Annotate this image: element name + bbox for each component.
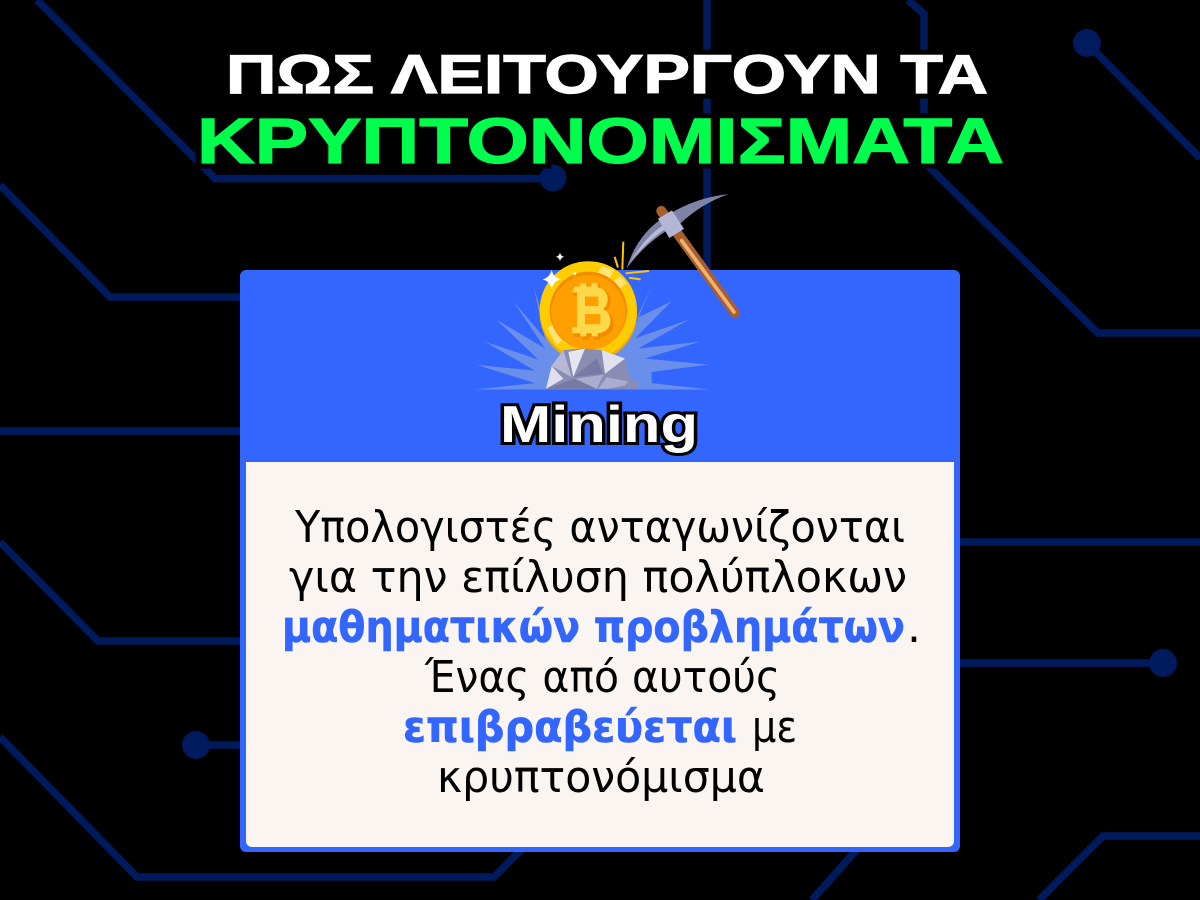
card body background — [246, 462, 954, 847]
burst rays — [475, 286, 710, 390]
card frame and blue header — [240, 270, 960, 852]
icon: bitcoin mining illustration — [475, 194, 735, 390]
title line 2 fill: ΚΡΥΠΤΟΝΟΜΙΣΜΑΤΑ — [197, 105, 1004, 177]
body text — [282, 502, 921, 803]
pickaxe — [627, 194, 735, 313]
title — [197, 43, 1004, 177]
body text: για την επίλυση πολύπλοκων — [289, 552, 907, 603]
title line 1: ΠΩΣ ΛΕΙΤΟΥΡΓΟΥΝ ΤΑ — [226, 43, 988, 105]
panel: mining card — [240, 270, 960, 852]
body text: Υπολογιστές ανταγωνίζονται — [294, 502, 905, 553]
title line 2: ΚΡΥΠΤΟΝΟΜΙΣΜΑΤΑ — [197, 105, 1004, 177]
sparkles — [542, 252, 577, 289]
body text: κρυπτονόμισμα — [437, 752, 765, 803]
sparks — [615, 242, 649, 279]
body text: επιβραβεύεται — [403, 702, 737, 753]
heading: Mining: Mining — [500, 396, 698, 454]
body text: Ένας από αυτούς — [424, 652, 780, 703]
body text: μαθηματικών προβλημάτων — [282, 602, 905, 653]
rock — [546, 348, 637, 389]
body text: με — [752, 702, 797, 753]
bitcoin coin — [540, 261, 637, 362]
title line 1 fill: ΠΩΣ ΛΕΙΤΟΥΡΓΟΥΝ ΤΑ — [226, 43, 988, 105]
body text: . — [907, 602, 921, 653]
